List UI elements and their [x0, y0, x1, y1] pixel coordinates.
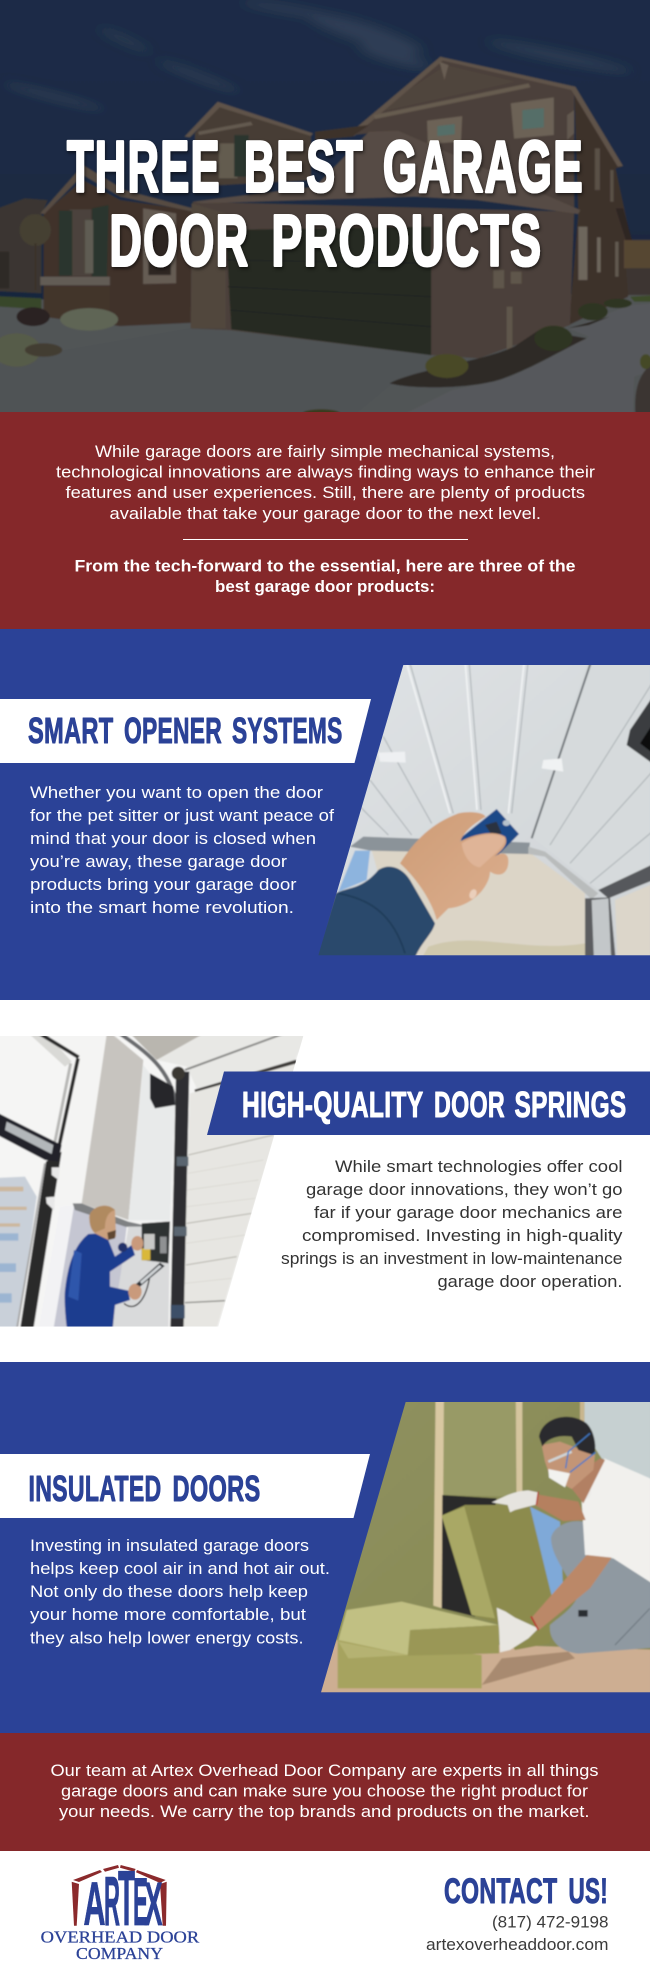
- heading banner: OPENER: [124, 710, 222, 751]
- contact block: CONTACT: [444, 1872, 558, 1911]
- panel: introduction: [0, 412, 650, 629]
- body text: springs is an investment in low-maintenance: [281, 1249, 622, 1268]
- photo: hand pressing garage remote: [318, 665, 650, 956]
- body text: [30, 783, 334, 917]
- contact block: [426, 1872, 608, 1954]
- body text: mind that your door is closed when: [30, 829, 316, 848]
- logo company name: COMPANY: [76, 1944, 163, 1963]
- gloves: [492, 1490, 538, 1512]
- heading banner: SYSTEMS: [232, 710, 342, 751]
- logo company name: OVERHEAD DOOR: [41, 1928, 200, 1946]
- body text: While smart technologies offer cool: [335, 1157, 622, 1176]
- intro bold lead-in: From the tech-forward to the essential, here are three of the: [74, 556, 576, 576]
- intro text: technological innovations are always finding ways to enhance their: [56, 462, 595, 482]
- window frame: [38, 1033, 79, 1057]
- floor: [372, 850, 586, 956]
- body text: Not only do these doors help keep: [30, 1582, 308, 1601]
- body text: for the pet sitter or just want peace of: [30, 806, 334, 825]
- remote: [460, 808, 520, 856]
- contact block: (817) 472-9198: [492, 1912, 608, 1932]
- intro bold lead-in: best garage door products:: [215, 577, 435, 596]
- wall brackets: [52, 1167, 60, 1180]
- panel: high-quality door springs: [0, 1036, 650, 1327]
- ground: [0, 294, 650, 412]
- intro text: features and user experiences. Still, there are plenty of products: [66, 483, 585, 502]
- logo: Artex Overhead Door Company: [41, 1854, 200, 1963]
- upper windows: [511, 97, 554, 139]
- trousers: [550, 1521, 650, 1654]
- heading banner: HIGH-QUALITY: [242, 1084, 424, 1125]
- mulch beds and shrubs: [390, 330, 587, 387]
- logo wordmark: R: [104, 1862, 120, 1940]
- heading banner: [0, 1454, 370, 1518]
- panel: smart opener systems: [0, 629, 650, 1000]
- body text: garage door operation.: [438, 1272, 622, 1291]
- body text: garage door innovations, they won’t go: [306, 1180, 622, 1199]
- body text: Investing in insulated garage doors: [30, 1536, 309, 1555]
- clouds: [20, 3, 618, 106]
- panel: closing statement: Our team at Artex Overhead Door Company are experts in all things: [50, 1761, 598, 1780]
- garage wall: [191, 202, 574, 358]
- corner frame: [598, 864, 650, 898]
- upper story left gable: [195, 105, 311, 187]
- body text: you’re away, these garage door: [30, 852, 287, 871]
- logo company name: [41, 1928, 200, 1963]
- intro text: While garage doors are fairly simple mechanical systems,: [95, 442, 555, 461]
- intro text: available that take your garage door to the next level.: [110, 504, 541, 523]
- head: [572, 1458, 605, 1503]
- main roof over garage: [193, 131, 580, 214]
- ceiling and header: [132, 1036, 200, 1060]
- panel: closing statement: garage doors and can make sure you choose the right product for: [61, 1782, 588, 1800]
- body text: they also help lower energy costs.: [30, 1628, 304, 1648]
- door panel seams: [360, 660, 650, 883]
- heading banner: DOOR: [434, 1084, 505, 1125]
- contact block: US!: [568, 1872, 608, 1911]
- title: THREE: [67, 128, 221, 208]
- hand: [400, 812, 508, 920]
- intro text: [56, 442, 595, 523]
- tree: [19, 214, 51, 246]
- contact block: artexoverheaddoor.com: [426, 1935, 608, 1954]
- photo: technician at garage door control box: [0, 1036, 304, 1327]
- photo: worker fitting mineral wool insulation: [321, 1402, 650, 1692]
- white jamb: [45, 1030, 107, 1207]
- door: [182, 1063, 297, 1340]
- tall main block front: [352, 58, 574, 213]
- heading banner: [207, 1072, 650, 1135]
- right side windows and fence: [578, 227, 587, 280]
- floor: [308, 1640, 650, 1705]
- garage door: [226, 227, 431, 355]
- body text: [281, 1157, 623, 1291]
- held insulation slab: [442, 1505, 552, 1650]
- stacked insulation: [338, 1640, 482, 1688]
- body text: far if your garage door mechanics are: [314, 1203, 622, 1222]
- logo: Artex Overhead Door Company: X: [144, 1870, 163, 1938]
- plasterboard: [584, 1402, 650, 1480]
- sleeve: [318, 866, 436, 956]
- panel: closing statement: your needs. We carry the top brands and products on the market.: [59, 1802, 590, 1821]
- distant house: [0, 198, 48, 293]
- arms: [532, 1555, 612, 1630]
- control box: [142, 1221, 170, 1263]
- logo wordmark: A: [84, 1870, 106, 1938]
- hero photo: house with garage at dusk: [0, 0, 650, 440]
- body text: products bring your garage door: [30, 875, 297, 894]
- panel: closing statement: [0, 1733, 650, 1851]
- stone house: [44, 180, 193, 326]
- title: BEST: [244, 128, 364, 208]
- worker: [65, 1233, 135, 1340]
- body text: compromised. Investing in high-quality: [302, 1226, 623, 1245]
- title: [67, 128, 584, 282]
- logo wordmark: T: [118, 1854, 135, 1942]
- intro bold lead-in: [74, 556, 576, 596]
- cavity: [442, 1495, 497, 1617]
- heading banner: DOORS: [172, 1468, 260, 1509]
- grass and bushes: [0, 295, 41, 309]
- logo wordmark: E: [133, 1864, 148, 1940]
- vertical track and rollers: [170, 1072, 189, 1340]
- body text: helps keep cool air in and hot air out.: [30, 1559, 330, 1578]
- body text: Whether you want to open the door: [30, 783, 323, 802]
- heading banner: [0, 699, 371, 763]
- body text: [30, 1536, 330, 1648]
- logo wordmark: [84, 1854, 163, 1942]
- heading banner: SMART: [28, 710, 114, 751]
- gray wall: [82, 1030, 143, 1220]
- heading banner: INSULATED: [28, 1468, 162, 1509]
- white panel: [128, 1065, 175, 1221]
- shirt: [582, 1458, 650, 1592]
- body text: into the smart home revolution.: [30, 898, 294, 917]
- body text: your home more comfortable, but: [30, 1605, 306, 1624]
- title: DOOR: [110, 202, 250, 282]
- logo roof: [72, 1865, 167, 1926]
- dark wall box: [626, 699, 650, 763]
- studs: [433, 1388, 444, 1608]
- panel: insulated doors: [0, 1362, 650, 1733]
- window view: [0, 1177, 37, 1340]
